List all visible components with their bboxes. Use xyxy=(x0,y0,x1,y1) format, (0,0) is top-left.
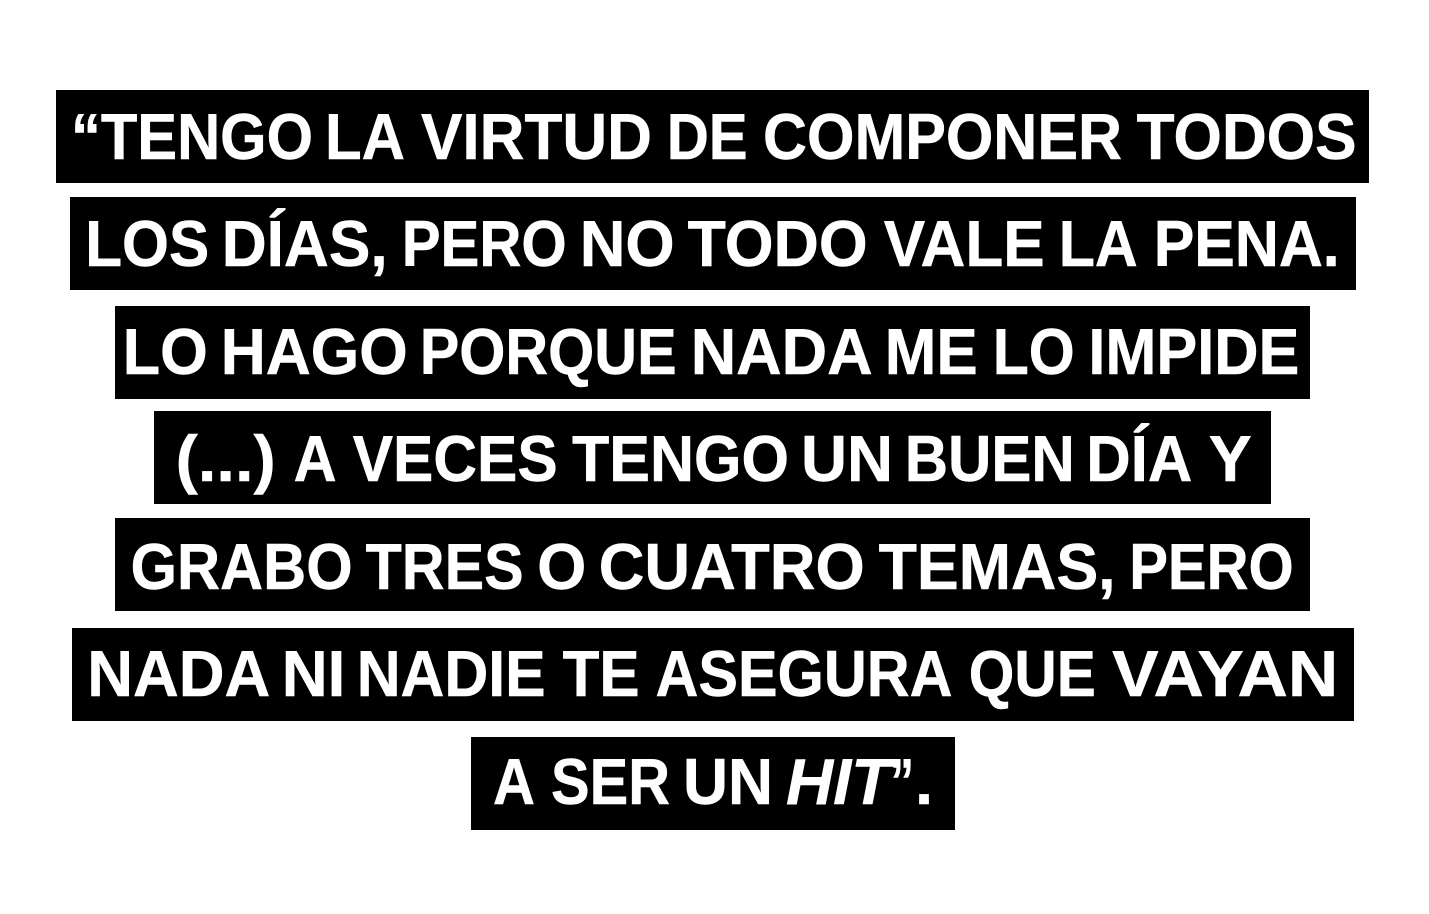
quote line 2: PENA. xyxy=(1154,207,1340,280)
quote line 3: HAGO xyxy=(221,315,408,388)
quote line 4: Y xyxy=(1209,422,1252,495)
quote line 5: PERO xyxy=(1129,530,1294,603)
quote line 7 xyxy=(471,737,955,830)
quote line 1: “TENGO xyxy=(71,100,313,173)
quote line 1: LA xyxy=(325,100,405,173)
quote line 5: O xyxy=(537,530,586,603)
quote line 1: TODOS xyxy=(1137,100,1357,173)
quote line 7: HIT xyxy=(786,745,896,818)
quote line 7: . xyxy=(915,745,933,818)
quote line 6 xyxy=(72,628,1354,721)
quote line 2: LA xyxy=(1059,207,1138,280)
quote line 3: LO xyxy=(123,315,208,388)
quote line 5: TEMAS, xyxy=(879,530,1116,603)
quote line 5: GRABO xyxy=(131,530,353,603)
quote line 6: TE xyxy=(563,637,640,710)
quote line 2: DÍAS, xyxy=(222,207,388,280)
quote line 7: A xyxy=(493,745,535,818)
quote line 5 xyxy=(115,518,1310,611)
quote line 6: ASEGURA xyxy=(656,637,952,710)
quote line 7: SER xyxy=(551,745,670,818)
quote line 4 xyxy=(154,411,1271,504)
quote line 7: UN xyxy=(683,745,773,818)
quote line 3 xyxy=(115,306,1310,399)
quote line 6: VAYAN xyxy=(1112,637,1338,710)
quote line 3: NADA xyxy=(691,315,873,388)
quote line 4: TENGO xyxy=(572,422,789,495)
quote line 3: LO xyxy=(993,315,1075,388)
quote line 2: PERO xyxy=(402,207,567,280)
quote line 4: UN xyxy=(801,422,893,495)
quote line 4: A xyxy=(294,422,337,495)
quote line 7: ” xyxy=(890,745,914,818)
quote line 1 xyxy=(56,90,1369,183)
quote line 6: NI xyxy=(282,637,345,710)
quote line 2 xyxy=(70,197,1356,290)
quote line 3: IMPIDE xyxy=(1088,315,1299,388)
quote line 5: CUATRO xyxy=(599,530,865,603)
quote line 1: VIRTUD xyxy=(421,100,652,173)
quote line 1: DE xyxy=(667,100,748,173)
quote line 2: VALE xyxy=(884,207,1045,280)
quote line 5: TRES xyxy=(366,530,524,603)
quote line 3: ME xyxy=(885,315,978,388)
quote line 4: VECES xyxy=(353,422,558,495)
quote line 2: NO xyxy=(580,207,675,280)
quote line 6: NADIE xyxy=(357,637,546,710)
quote line 4: BUEN xyxy=(905,422,1075,495)
quote line 1: COMPONER xyxy=(763,100,1122,173)
quote line 2: TODO xyxy=(688,207,868,280)
quote line 2: LOS xyxy=(85,207,209,280)
quote line 6: QUE xyxy=(969,637,1096,710)
quote line 4: DÍA xyxy=(1086,422,1192,495)
quote line 3: PORQUE xyxy=(420,315,677,388)
quote line 4: (...) xyxy=(176,422,276,495)
quote line 6: NADA xyxy=(87,637,270,710)
